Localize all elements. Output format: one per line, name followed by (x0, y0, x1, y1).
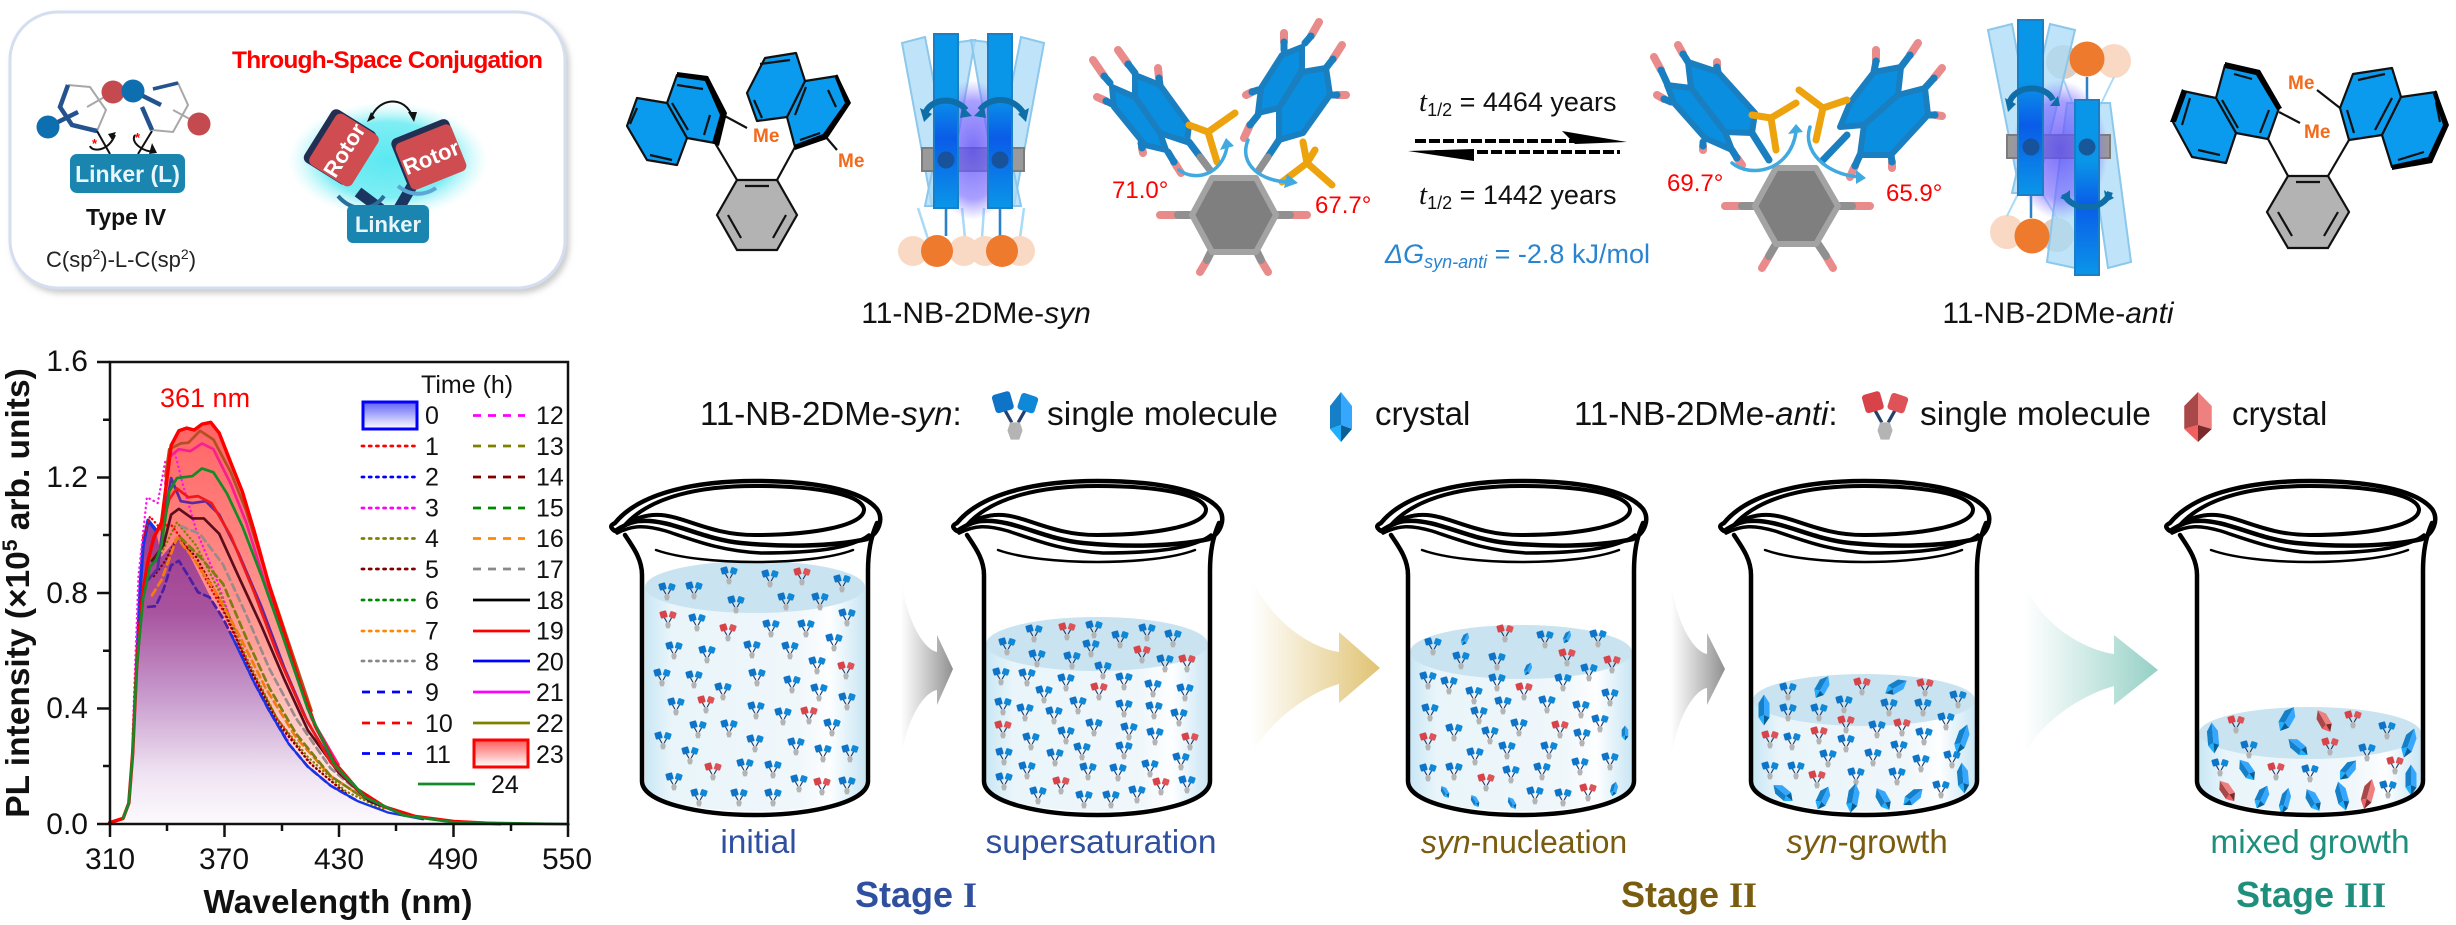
skeletal structure: syn isomer (627, 53, 864, 250)
legend: time in hours: 4 (425, 525, 439, 553)
icon: rotors on linker: Rotor (399, 135, 463, 180)
label: Linker: Linker (355, 212, 421, 237)
legend row: syn: crystal (1375, 395, 1470, 432)
beaker: initial (611, 481, 880, 815)
legend: time in hours: 12 (536, 402, 564, 430)
legend: time in hours: 9 (425, 679, 439, 707)
compound label: syn: 11-NB-2DMe-syn (861, 297, 1091, 330)
legend: time in hours: 8 (425, 648, 439, 676)
compound label: anti: 11-NB-2DMe-anti (1942, 297, 2175, 330)
rotor diagram: anti isomer (1988, 20, 2131, 275)
text: half-life reverse: = 1442 years (1452, 180, 1616, 210)
angle labels: anti: 69.7° (1667, 170, 1723, 197)
y axis tick labels: 0.0 (46, 808, 88, 841)
legend: time in hours: 21 (536, 679, 564, 707)
text: half-life reverse: 1/2 (1427, 193, 1452, 213)
beaker: supersaturation (953, 481, 1222, 815)
text: C(sp2)-L-C(sp2): C(sp (46, 247, 92, 272)
legend: time in hours: 5 (425, 556, 439, 584)
legend row: syn: 11-NB-2DMe-syn: (700, 395, 962, 432)
legend: time in hours: 24 (491, 771, 519, 799)
legend: time in hours: 13 (536, 433, 564, 461)
legend: time in hours: 19 (536, 618, 564, 646)
caption: mixed growth: mixed growth (2210, 824, 2410, 861)
angle labels: anti: 65.9° (1886, 180, 1942, 207)
x axis tick labels (85, 843, 592, 876)
icon: rotors on linker: Rotor (318, 118, 371, 182)
text: half-life forward: = 4464 years (1452, 87, 1616, 117)
x axis tick labels: 550 (542, 843, 592, 876)
text: C(sp2)-L-C(sp2): )-L-C(sp (100, 247, 181, 272)
icon: type IV molecule (36, 80, 210, 154)
text: half-life forward: t (1419, 86, 1428, 118)
legend: time in hours: 2 (425, 464, 439, 492)
x axis tick labels: 490 (428, 843, 478, 876)
legend row: anti: crystal (2232, 395, 2327, 432)
arrow: teal stage II to III (2024, 582, 2158, 757)
label: Linker (L): Linker (L) (75, 161, 180, 187)
heading: Through-Space Conjugation: Through-Space Conjugation (232, 47, 543, 74)
angle labels: syn: 71.0° (1112, 177, 1168, 204)
legend row: anti (1574, 390, 2327, 442)
arrow: gold stage I to II (1251, 577, 1380, 755)
legend: time in hours: 0 (425, 402, 439, 430)
legend row: syn: single molecule (1047, 396, 1278, 433)
y axis tick labels: 0.8 (46, 577, 88, 610)
angle labels: syn: 67.7° (1315, 192, 1371, 219)
rotor diagram: syn isomer (898, 34, 1044, 267)
skeletal structure: syn isomer: Me (753, 126, 779, 147)
axes frame and ticks (97, 362, 568, 837)
skeletal structure: syn isomer: Me (838, 151, 864, 172)
line chart: PL intensity vs wavelength (0, 345, 592, 920)
legend: time in hours: 18 (536, 587, 564, 615)
skeletal structure: anti isomer (2170, 62, 2449, 248)
beaker: syn-growth (1720, 481, 1989, 815)
x axis tick labels: 310 (85, 843, 135, 876)
text: half-life reverse: t (1419, 179, 1428, 211)
y axis tick labels: 1.2 (46, 461, 88, 494)
caption: initial: initial (720, 824, 797, 861)
y axis tick labels: 1.6 (46, 345, 88, 378)
text: C(sp2)-L-C(sp2): 2 (92, 246, 100, 262)
legend: time in hours: 3 (425, 494, 439, 522)
icon: type IV molecule: * (135, 130, 141, 145)
red area: spectrum at 23 h (110, 422, 568, 824)
legend: time in hours: 1 (425, 433, 439, 461)
x axis title: Wavelength (nm) (204, 883, 472, 920)
text: free energy difference: ΔG (1384, 239, 1424, 269)
angle labels: anti (1667, 170, 1942, 207)
beaker: syn-nucleation (1377, 481, 1646, 815)
x axis tick labels: 370 (199, 843, 249, 876)
y axis tick labels (46, 345, 88, 841)
purple area: spectrum at 0 h (110, 520, 568, 824)
3D structure: anti isomer (1654, 43, 1942, 268)
caption: supersaturation: supersaturation (986, 824, 1216, 861)
arrow: grey stage II (1671, 583, 1725, 757)
legend row: syn (700, 390, 1470, 442)
x axis tick labels: 430 (314, 843, 364, 876)
caption: syn-nucleation: syn-nucleation (1421, 824, 1627, 860)
legend: time in hours: 22 (536, 710, 564, 738)
text: half-life forward: 1/2 (1427, 100, 1452, 120)
text: C(sp2)-L-C(sp2): 2 (181, 246, 189, 262)
heading: Stage II: Stage II (1621, 874, 1757, 915)
legend: time in hours: 17 (536, 556, 564, 584)
legend: time in hours: 11 (425, 741, 451, 769)
y axis title: PL intensity (×10 (0, 551, 37, 818)
legend row: anti: 11-NB-2DMe-anti: (1574, 395, 1837, 432)
beaker: mixed growth (2166, 481, 2435, 815)
legend: time in hours: 7 (425, 618, 439, 646)
skeletal structure: anti isomer: Me (2304, 122, 2330, 143)
legend: time in hours (362, 371, 564, 799)
legend row: anti: single molecule (1920, 396, 2151, 433)
heading: Stage I: Stage I (855, 874, 977, 915)
icon: rotors on linker (288, 101, 488, 218)
icon: type IV molecule: * (92, 136, 98, 151)
text: free energy difference: syn-anti (1424, 252, 1488, 272)
legend: time in hours: Time (h) (421, 371, 513, 399)
heading: Stage III: Stage III (2236, 874, 2386, 915)
skeletal structure: anti isomer: Me (2288, 73, 2314, 94)
legend: time in hours: 10 (425, 710, 453, 738)
y axis tick labels: 0.4 (46, 692, 88, 725)
equilibrium arrows (1408, 131, 1627, 161)
legend: time in hours: 15 (536, 494, 564, 522)
peak annotation: 361 nm: 361 nm (160, 383, 250, 413)
spectral curves, 0 to 24 h (110, 422, 568, 824)
caption: syn-growth: syn-growth (1786, 823, 1948, 860)
legend: time in hours: 6 (425, 587, 439, 615)
legend: time in hours: 20 (536, 648, 564, 676)
arrow: grey stage I (901, 580, 953, 757)
text: free energy difference: = -2.8 kJ/mol (1487, 239, 1650, 269)
angle labels: syn (1112, 177, 1371, 219)
3D structure: syn isomer (1093, 22, 1346, 272)
legend: time in hours: 23 (536, 741, 564, 769)
y axis title: arb. units) (0, 368, 37, 540)
legend: time in hours: 16 (536, 525, 564, 553)
text: Type IV: Type IV (86, 204, 167, 230)
label: Linker (347, 205, 429, 243)
text: C(sp2)-L-C(sp2): ) (189, 247, 196, 272)
label: Linker (L) (70, 154, 185, 193)
legend: time in hours: 14 (536, 464, 564, 492)
panel: through-space conjugation design (10, 12, 565, 288)
